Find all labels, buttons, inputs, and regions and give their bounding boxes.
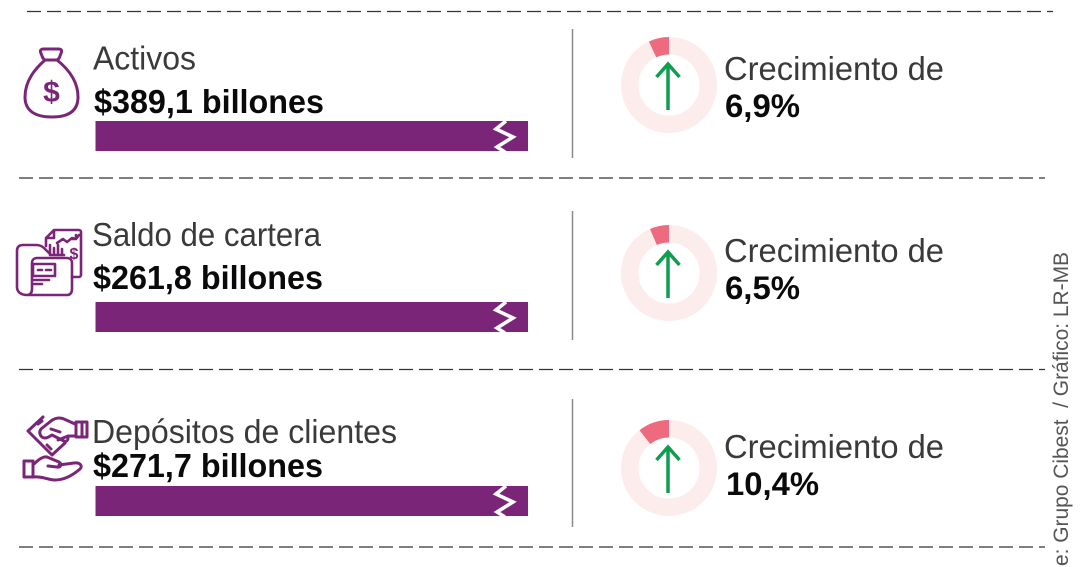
growth: depositos — [630, 420, 944, 507]
growth: activos — [630, 37, 944, 124]
donut: 10,4% — [630, 420, 708, 507]
donut: 6,5% — [630, 225, 708, 312]
growth: saldo — [630, 225, 944, 312]
label: activos: Activos — [93, 40, 196, 76]
icon: hands and money — [24, 417, 87, 480]
bar: saldo — [96, 302, 528, 333]
bar: activos — [96, 121, 528, 152]
text: growth: Crecimiento de — [724, 428, 944, 465]
panel: depositos de clientes — [24, 413, 944, 517]
panel: activos — [25, 37, 944, 152]
icon: up arrow — [656, 64, 680, 110]
donut: 6,9% — [630, 37, 708, 124]
label: depositos: Depósitos de clientes — [92, 413, 397, 450]
icon: money bag: $ — [43, 76, 60, 109]
icon: folder and report: $ — [70, 246, 79, 263]
panel: saldo de cartera — [17, 216, 944, 333]
text: growth: Crecimiento de — [724, 50, 944, 87]
icon: up arrow — [656, 252, 680, 298]
icon: up arrow — [656, 447, 680, 493]
value: growth: 6,5% — [725, 270, 800, 306]
divider: activos — [572, 29, 574, 158]
value: growth: 6,9% — [725, 88, 800, 124]
divider: depositos — [572, 399, 574, 527]
value: growth: 10,4% — [726, 466, 819, 502]
value: saldo: $261,8 billones — [93, 259, 323, 296]
source credit: e: Grupo Cibest / Gráfico: LR-MB — [1050, 252, 1073, 566]
text: growth: Crecimiento de — [724, 232, 944, 269]
value: activos: $389,1 billones — [94, 83, 324, 120]
icon: folder and report — [17, 230, 81, 295]
icon: money bag — [25, 49, 78, 117]
label: saldo: Saldo de cartera — [92, 216, 322, 253]
divider: saldo — [572, 211, 574, 340]
value: depositos: $271,7 billones — [93, 447, 323, 484]
bar: depositos — [96, 486, 528, 517]
